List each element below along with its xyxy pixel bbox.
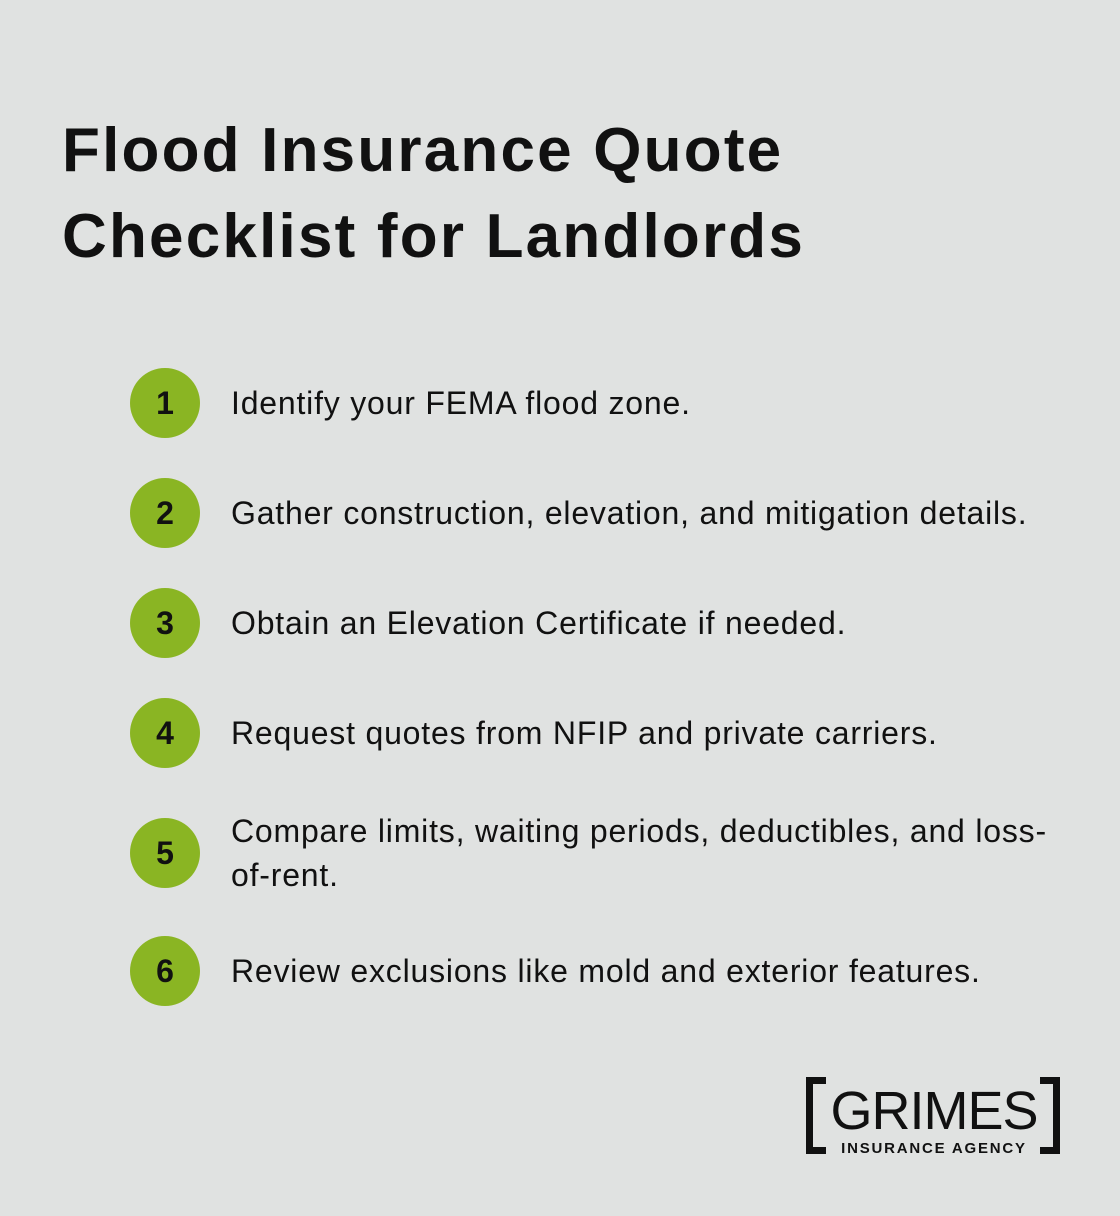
item 3 (130, 588, 846, 658)
item 4 (130, 698, 938, 768)
item 5: of-rent. (231, 857, 339, 893)
item 2 (130, 478, 1027, 548)
item 5 (130, 813, 1047, 893)
item 6 (130, 936, 981, 1006)
item 5: Compare limits, waiting periods, deductibles, and loss- (231, 813, 1047, 849)
title: Checklist for Landlords (62, 202, 805, 271)
item 4: 4 (156, 715, 174, 751)
item 2: 2 (156, 495, 174, 531)
item 3: 3 (156, 605, 174, 641)
item 6: Review exclusions like mold and exterior features. (231, 953, 981, 989)
item 5: 5 (156, 835, 174, 871)
logo: INSURANCE AGENCY (841, 1140, 1027, 1157)
item 1 (130, 368, 691, 438)
item 1: Identify your FEMA flood zone. (231, 385, 691, 421)
item 1: 1 (156, 385, 174, 421)
title: Flood Insurance Quote (62, 116, 783, 185)
logo (806, 1077, 1060, 1157)
item 2: Gather construction, elevation, and mitigation details. (231, 495, 1027, 531)
logo: GRIMES (830, 1081, 1038, 1141)
item 3: Obtain an Elevation Certificate if needed. (231, 605, 846, 641)
item 6: 6 (156, 953, 174, 989)
item 4: Request quotes from NFIP and private carriers. (231, 715, 938, 751)
title (62, 116, 805, 271)
